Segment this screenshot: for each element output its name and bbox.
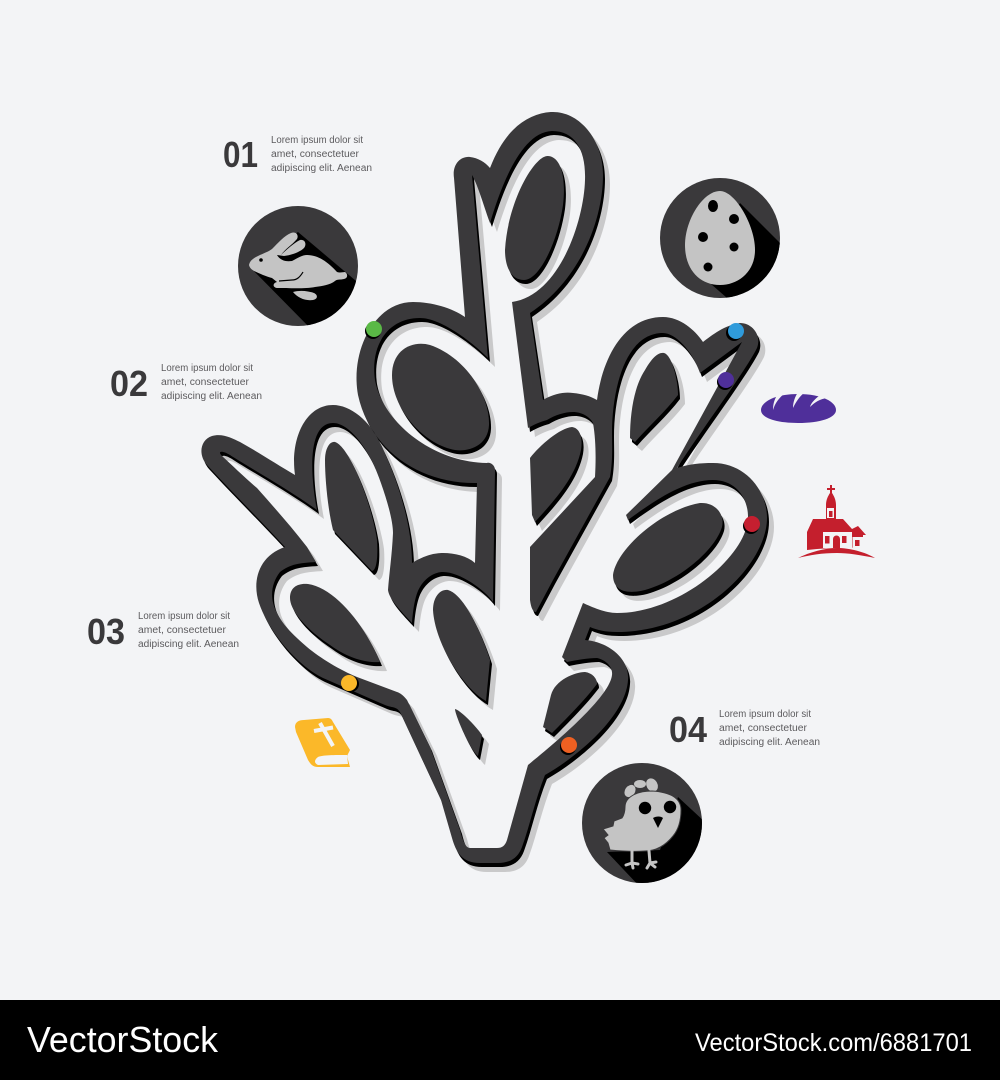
text block 01: Lorem ipsum dolor sit <box>271 135 363 146</box>
number 03: 03 <box>87 611 125 652</box>
footer logo: VectorStock <box>27 1019 219 1060</box>
text block 04: amet, consectetuer <box>719 723 808 734</box>
step 02 <box>110 363 262 404</box>
number 01: 01 <box>223 134 258 175</box>
step 03 <box>87 611 239 652</box>
marker: orange dot <box>560 737 577 755</box>
number 02: 02 <box>110 363 148 404</box>
text block 03 <box>138 611 239 650</box>
icon: chick badge <box>582 763 705 887</box>
text block 04 <box>719 709 820 748</box>
text block 04: Lorem ipsum dolor sit <box>719 709 811 720</box>
icon: church <box>798 485 875 558</box>
icon: rabbit badge <box>238 206 362 330</box>
text block 03: adipiscing elit. Aenean <box>138 639 239 650</box>
marker: yellow dot <box>341 675 359 692</box>
text block 04: adipiscing elit. Aenean <box>719 737 820 748</box>
marker: purple dot <box>717 372 734 390</box>
text block 01 <box>271 135 372 174</box>
icon: bread <box>761 392 836 423</box>
footer url: VectorStock.com/6881701 <box>695 1029 972 1057</box>
text block 02: adipiscing elit. Aenean <box>161 391 262 402</box>
text block 02 <box>161 363 262 402</box>
text block 01: adipiscing elit. Aenean <box>271 163 372 174</box>
footer bar <box>0 1000 1000 1080</box>
text block 01: amet, consectetuer <box>271 149 360 160</box>
step 04 <box>669 709 820 750</box>
marker: green dot <box>365 321 382 339</box>
text block 02: amet, consectetuer <box>161 377 250 388</box>
icon: egg badge <box>660 178 785 305</box>
number 04: 04 <box>669 709 707 750</box>
step 01 <box>223 134 372 175</box>
marker: red dot <box>743 516 760 534</box>
marker: blue dot <box>726 323 744 341</box>
text block 02: Lorem ipsum dolor sit <box>161 363 253 374</box>
text block 03: amet, consectetuer <box>138 625 227 636</box>
text block 03: Lorem ipsum dolor sit <box>138 611 230 622</box>
branch line illustration with leaves <box>201 112 774 872</box>
icon: bible book <box>295 718 350 767</box>
